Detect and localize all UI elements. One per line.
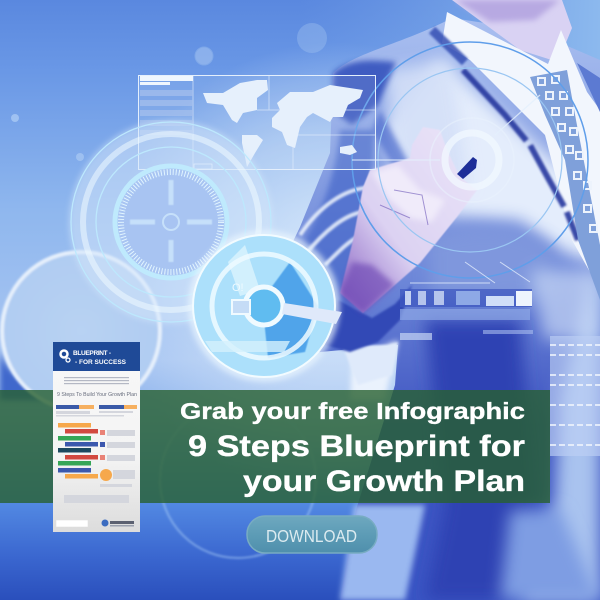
green banner: [0, 390, 550, 503]
right HUD: [550, 336, 600, 456]
continents: [203, 80, 363, 167]
dark jacket right of tie: [577, 63, 600, 112]
large faint rings: [2, 252, 316, 558]
thumbnail step ribbons: [58, 423, 98, 478]
thumbnail header: - FOR SUCCESS: [75, 359, 127, 366]
suit jacket: [262, 18, 600, 600]
cyan radar dial: O!: [232, 282, 244, 294]
thumbnail header: [53, 342, 140, 371]
hand holding pen: [340, 127, 477, 313]
download button: DOWNLOAD: [266, 526, 357, 546]
shirt collar and front: [442, 12, 600, 290]
compass dial: [69, 120, 273, 324]
lapel stripe: [463, 70, 578, 240]
thumbnail stat bars: [56, 405, 137, 416]
infographic thumbnail: [53, 342, 140, 532]
cyan radar dial: [188, 230, 342, 382]
neck: [452, 0, 572, 62]
necktie: [530, 70, 600, 300]
headline: Grab your free Infographic: [180, 398, 525, 424]
headline: your Growth Plan: [243, 465, 525, 498]
thumbnail side notes: [100, 430, 135, 487]
thumbnail intro text: [64, 377, 129, 384]
world map panel: [138, 75, 376, 170]
thumbnail heading: 9 Steps To Build Your Growth Plan: [57, 392, 137, 398]
download button: [247, 516, 377, 553]
pen: [457, 157, 477, 179]
thumbnail header: BLUEPRINT -: [73, 350, 111, 357]
headline: 9 Steps Blueprint for: [188, 430, 525, 463]
target circle: [352, 42, 588, 278]
thumbnail footer: [56, 495, 134, 527]
data table: [140, 76, 212, 169]
cuff and white shirt sleeve: [325, 285, 412, 400]
headline: [180, 398, 525, 498]
HUD widgets: [400, 262, 600, 456]
